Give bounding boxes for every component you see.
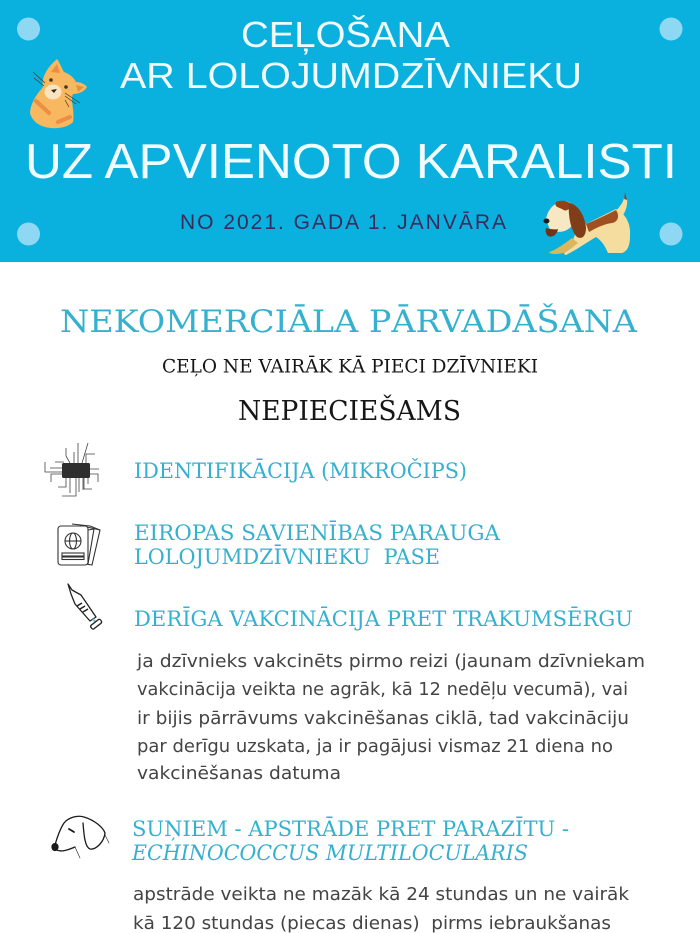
- heading: non-commercial movement: NEKOMERCIĀLA PĀRVADĀŠANA: [60, 302, 638, 340]
- date subtitle: NO 2021. GADA 1. JANVĀRA: [180, 211, 506, 234]
- item: rabies vaccination: DERĪGA VAKCINĀCIJA PRET TRAKUMSĒRGU: [134, 607, 633, 631]
- title line 2: AR LOLOJUMDZĪVNIEKU: [120, 55, 582, 96]
- vaccination text block: par derīgu uzskata, ja ir pagājusi vismaz 21 diena no: [137, 736, 613, 757]
- icon: microchip: [45, 443, 99, 496]
- item: passport: [134, 521, 501, 569]
- item: passport: EIROPAS SAVIENĪBAS PARAUGA: [134, 521, 501, 545]
- corner dot top right: [660, 18, 682, 40]
- tail: [616, 198, 627, 217]
- item: identification: IDENTIFIKĀCIJA (MIKROČIPS): [134, 458, 467, 483]
- vaccination text block: vakcinēšanas datuma: [137, 763, 341, 784]
- body and legs: [564, 209, 630, 255]
- item: dogs echinococcus: [131, 817, 569, 865]
- head: [546, 201, 575, 232]
- icon: syringe: [68, 584, 102, 630]
- back patch: [586, 210, 618, 232]
- subheading: five animals: CEĻO NE VAIRĀK KĀ PIECI DZĪVNIEKI: [162, 354, 538, 378]
- corner dot bottom right: [660, 222, 682, 246]
- icon: dog: [544, 192, 630, 255]
- treatment text block: apstrāde veikta ne mazāk kā 24 stundas un ne vairāk: [133, 884, 630, 905]
- item: dogs echinococcus: SUŅIEM - APSTRĀDE PRET PARAZĪTU -: [132, 817, 569, 841]
- treatment text block: [133, 884, 630, 933]
- main title: UZ APVIENOTO KARALISTI: [25, 135, 677, 189]
- item: dogs echinococcus: ECHINOCOCCUS MULTILOCULARIS: [131, 841, 528, 865]
- vaccination text block: [136, 651, 645, 784]
- vaccination text block: ja dzīvnieks vakcinēts pirmo reizi (jaunam dzīvniekam: [136, 651, 645, 672]
- icon: dog head: [52, 816, 109, 858]
- icon: passport: [58, 524, 100, 565]
- corner dot top left: [17, 18, 40, 40]
- item: passport: LOLOJUMDZĪVNIEKU PASE: [134, 545, 440, 569]
- corner dot bottom left: [17, 222, 40, 246]
- vaccination text block: vakcinācija veikta ne agrāk, kā 12 nedēļu vecumā), vai: [137, 679, 628, 700]
- vaccination text block: ir bijis pārrāvums vakcinēšanas ciklā, tad vakcināciju: [137, 708, 629, 729]
- title line 1: CEĻOŠANA: [241, 14, 450, 55]
- heading: required: NEPIECIEŠAMS: [238, 393, 461, 427]
- icon: cat: [30, 59, 87, 128]
- header banner: [0, 0, 700, 262]
